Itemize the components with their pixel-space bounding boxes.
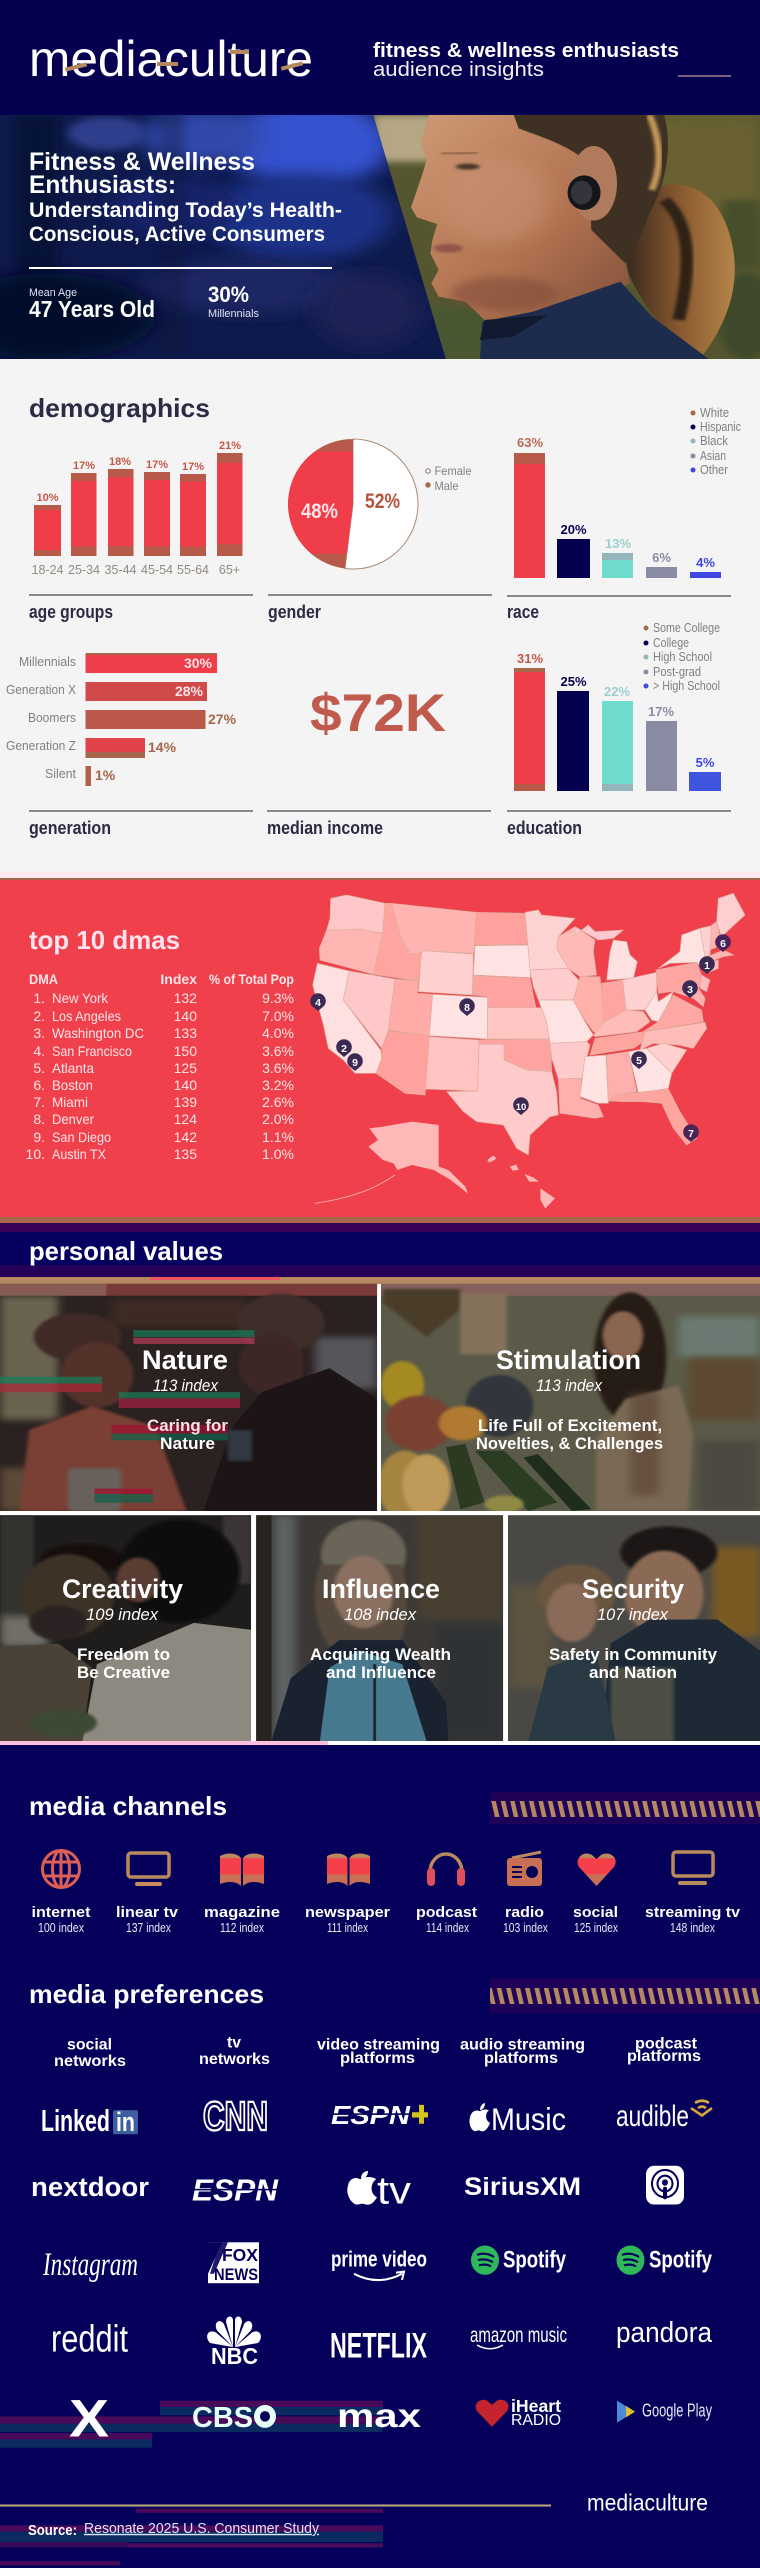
- label: generation: generation: [29, 818, 111, 838]
- stat: mean age: [29, 287, 155, 322]
- channel labels: social: [573, 1904, 618, 1921]
- tile: nature: Nature: [142, 1345, 228, 1375]
- icon: internet: [42, 1850, 80, 1888]
- photo: couple on couch: [0, 1515, 251, 1741]
- logo: spotify audio: [471, 2245, 566, 2275]
- table: top 10 dmas: 7.0%: [262, 1008, 294, 1024]
- legend: education: [644, 621, 720, 693]
- logo: fox news: NEWS: [214, 2266, 258, 2284]
- chart: race: 13%: [605, 536, 631, 551]
- logo: fox news: FOX: [222, 2245, 258, 2265]
- header band: [0, 0, 760, 115]
- logo: espn plus: ESPN: [331, 2101, 411, 2130]
- table: top 10 dmas: 1.: [33, 990, 45, 1006]
- legend: race: Asian: [700, 449, 726, 463]
- table: top 10 dmas: 9.: [33, 1129, 45, 1145]
- logo: reddit: reddit: [51, 2318, 128, 2360]
- chart: age groups: 17%: [182, 461, 204, 473]
- table: top 10 dmas: 1.1%: [262, 1129, 294, 1145]
- tile: creativity: [0, 1515, 251, 1741]
- tile: stimulation: 113 index: [536, 1376, 602, 1395]
- channel index values: 111 index: [327, 1921, 369, 1935]
- table: top 10 dmas: 9.3%: [262, 990, 294, 1006]
- tile: influence: [256, 1515, 503, 1741]
- table: top 10 dmas: 125: [174, 1060, 197, 1076]
- channel labels: [32, 1904, 741, 1921]
- chart: age groups: 55-64: [177, 563, 209, 577]
- map pins: 3: [687, 984, 693, 996]
- chart: generation: 14%: [148, 739, 177, 755]
- chart: education: 5%: [696, 755, 715, 770]
- table: top 10 dmas: 142: [174, 1129, 197, 1145]
- label: education: education: [507, 818, 582, 838]
- logo: iheart radio: iHeart: [511, 2396, 561, 2416]
- column headers: platforms: [340, 2050, 415, 2067]
- table: top 10 dmas: San Francisco: [52, 1043, 132, 1059]
- table: top 10 dmas: Atlanta: [52, 1060, 94, 1076]
- table: top 10 dmas: 135: [174, 1146, 197, 1162]
- photo: woman at market: [378, 1284, 760, 1520]
- channel labels: radio: [505, 1904, 544, 1921]
- panel: media preferences: [0, 1978, 760, 2565]
- chart: race: 63%: [517, 435, 543, 450]
- logo: prime video: [331, 2247, 427, 2280]
- logo: x: X: [69, 2389, 109, 2448]
- chart: generation: Silent: [45, 766, 76, 781]
- table: top 10 dmas: 150: [174, 1043, 197, 1059]
- stat: mean age: Mean Age: [29, 287, 77, 299]
- chart: generation: Generation X: [6, 682, 76, 697]
- legend: race: [690, 406, 741, 477]
- legend: education: > High School: [653, 679, 720, 693]
- hero background: blue bokeh: [0, 100, 451, 360]
- source label: Source:: [28, 2523, 77, 2539]
- hero heading: Fitness & Wellness: [29, 148, 255, 176]
- map pins: 5: [636, 1055, 642, 1067]
- icon: apple podcasts: [646, 2166, 684, 2205]
- hero panel: [0, 100, 760, 360]
- column headers: networks: [54, 2053, 126, 2070]
- source link: Resonate 2025 U.S. Consumer Study: [84, 2520, 320, 2537]
- channel index values: 137 index: [126, 1921, 172, 1935]
- chart: generation: Generation Z: [6, 738, 76, 753]
- tile: security: 107 index: [597, 1605, 668, 1624]
- chart: education: 25%: [560, 674, 587, 689]
- logo: siriusxm: SiriusXM: [464, 2174, 581, 2201]
- tile: influence: 108 index: [344, 1605, 416, 1624]
- logo: cbs: CBS: [192, 2401, 253, 2433]
- icon: radio: [507, 1852, 542, 1886]
- logo: prime video: prime video: [331, 2247, 427, 2272]
- table: top 10 dmas: New York: [52, 990, 109, 1006]
- map pins: 10: [516, 1102, 526, 1113]
- column headers: platforms: [627, 2048, 701, 2065]
- table: top 10 dmas: 124: [174, 1111, 197, 1127]
- footer: [0, 2490, 708, 2539]
- table: top 10 dmas: Austin TX: [52, 1146, 107, 1162]
- chart: gender pie: [288, 439, 472, 569]
- chart: generation: Boomers: [28, 710, 76, 725]
- chart: age groups: 10%: [36, 492, 59, 504]
- icon: streaming tv: [673, 1852, 713, 1885]
- table: top 10 dmas: 3.6%: [262, 1060, 294, 1076]
- panel: personal values: [0, 1223, 760, 1745]
- logo grid: [0, 2034, 713, 2565]
- chart: age groups: [32, 440, 242, 577]
- icon: social heart: [578, 1853, 616, 1886]
- table: top 10 dmas: 5.: [33, 1060, 45, 1076]
- table: top 10 dmas: Index: [160, 971, 197, 987]
- column headers: podcast: [635, 2035, 697, 2052]
- channel index values: 100 index: [38, 1921, 85, 1935]
- stat: millennials: Millennials: [208, 308, 259, 320]
- chart: generation: 30%: [184, 655, 213, 671]
- tile: nature: [0, 1284, 378, 1511]
- chart: age groups: 65+: [219, 563, 240, 577]
- logo: cbs: [192, 2401, 276, 2433]
- logo: google play: [617, 2399, 713, 2423]
- column headers: [54, 2034, 701, 2070]
- chart: education: 31%: [517, 651, 543, 666]
- panel: top 10 dmas: [0, 872, 760, 1223]
- tile: security: Safety in Community: [549, 1645, 718, 1664]
- tile: stimulation: [378, 1284, 760, 1520]
- panel: media channels: [29, 1791, 760, 1935]
- logo: google play: Google Play: [642, 2399, 713, 2420]
- legend: education: Post-grad: [653, 665, 701, 679]
- table: top 10 dmas: 3.: [33, 1025, 45, 1041]
- logo: spotify podcast: Spotify: [649, 2246, 712, 2273]
- logo: instagram: Instagram: [42, 2246, 138, 2282]
- label: median income: median income: [267, 818, 383, 838]
- chart: education: [514, 621, 721, 791]
- column headers: audio streaming: [460, 2036, 585, 2053]
- logo: espn: ESPN: [192, 2174, 279, 2208]
- chart: age groups: 17%: [73, 460, 95, 472]
- table: top 10 dmas: 6.: [33, 1077, 45, 1093]
- logo: amazon music: amazon music: [470, 2323, 567, 2347]
- chart: gender pie: 52%: [365, 490, 400, 513]
- map pins: 9: [352, 1057, 358, 1069]
- channel index values: 148 index: [670, 1921, 716, 1935]
- photo: friends at cafe: [0, 1284, 378, 1511]
- table: top 10 dmas: 7.: [33, 1094, 45, 1110]
- table: top 10 dmas: Washington DC: [52, 1025, 144, 1041]
- table: top 10 dmas: DMA: [29, 971, 58, 987]
- chart: generation: [6, 653, 237, 786]
- tile: creativity: 109 index: [86, 1605, 158, 1624]
- table: top 10 dmas: Denver: [52, 1111, 94, 1127]
- heading: top 10 dmas: top 10 dmas: [29, 925, 180, 955]
- ponytail: [627, 184, 735, 355]
- logo: pandora: pandora: [616, 2316, 713, 2348]
- channel index values: 112 index: [220, 1921, 265, 1935]
- hero heading: Understanding Today’s Health-: [29, 199, 342, 222]
- header subtitle: audience insights: [373, 59, 544, 81]
- map pins: 7: [688, 1128, 694, 1140]
- stat: median income: $72K: [310, 684, 446, 743]
- chart: age groups: 18-24: [32, 563, 64, 577]
- logo: nextdoor: nextdoor: [31, 2172, 149, 2202]
- legend: race: Black: [700, 434, 729, 448]
- channel labels: streaming tv: [645, 1904, 741, 1921]
- tile: influence: and Influence: [326, 1663, 436, 1682]
- table: top 10 dmas: 133: [174, 1025, 197, 1041]
- stat: millennials: [208, 282, 259, 320]
- tile: security: Security: [582, 1574, 684, 1604]
- neck and face: [411, 115, 630, 320]
- chart: us map: [310, 893, 745, 1208]
- header title: fitness & wellness enthusiasts: [373, 40, 679, 62]
- table: top 10 dmas: 3.6%: [262, 1043, 294, 1059]
- legend: education: High School: [653, 650, 712, 664]
- table: top 10 dmas: 4.: [33, 1043, 45, 1059]
- map: alaska and hawaii: [315, 1122, 555, 1208]
- chart: gender pie: Male: [434, 479, 459, 493]
- column headers: tv: [227, 2034, 241, 2051]
- hero heading: Conscious, Active Consumers: [29, 223, 325, 246]
- logo: spotify audio: Spotify: [503, 2246, 566, 2273]
- map pins: [310, 934, 731, 1142]
- table: top 10 dmas: 4.0%: [262, 1025, 294, 1041]
- glitch bands: [0, 2401, 383, 2565]
- logo: apple music: Music: [491, 2101, 566, 2137]
- stat: millennials: 30%: [208, 282, 249, 307]
- tile: creativity: Creativity: [62, 1574, 183, 1604]
- chart: race: 20%: [560, 522, 587, 537]
- logo: max: max: [337, 2396, 421, 2434]
- table: top 10 dmas: 140: [174, 1077, 197, 1093]
- chart: race: [514, 406, 741, 578]
- hero photo: runner with earbud: [368, 115, 760, 360]
- logo: iheart radio: [476, 2396, 561, 2429]
- icon: podcast headphones: [427, 1854, 465, 1886]
- label: age groups: age groups: [29, 602, 113, 622]
- chart: race: 6%: [652, 550, 671, 565]
- ear and earbud: [570, 146, 617, 221]
- tile: nature: Caring for: [147, 1416, 228, 1435]
- table: top 10 dmas: 2.6%: [262, 1094, 294, 1110]
- channel index values: 103 index: [503, 1921, 549, 1935]
- chart: generation: 28%: [175, 683, 204, 699]
- label: gender: gender: [268, 602, 321, 622]
- tile: stimulation: Life Full of Excitement,: [478, 1416, 662, 1435]
- table: top 10 dmas: 3.2%: [262, 1077, 294, 1093]
- tile: influence: Influence: [322, 1574, 440, 1604]
- map pins: 4: [315, 997, 321, 1009]
- legend: education: College: [653, 636, 689, 650]
- heading: personal values: personal values: [29, 1236, 223, 1266]
- logo: linkedin: Linked: [41, 2105, 110, 2138]
- photo: hiking couple: [508, 1515, 760, 1741]
- logo: fox news: [208, 2242, 259, 2284]
- tile: creativity: Freedom to: [77, 1645, 170, 1664]
- table: top 10 dmas: 132: [174, 990, 197, 1006]
- logo: nbc: NBC: [211, 2343, 258, 2369]
- jacket: [480, 282, 710, 360]
- logo: cnn: CNN: [203, 2094, 268, 2139]
- table: top 10 dmas: 8.: [33, 1111, 45, 1127]
- logo: apple tv: tv: [377, 2170, 411, 2213]
- table: top 10 dmas: Miami: [52, 1094, 88, 1110]
- logo: spotify podcast: [616, 2245, 712, 2275]
- logo: iheart radio: RADIO: [511, 2411, 561, 2429]
- channel labels: linear tv: [116, 1904, 179, 1921]
- table: top 10 dmas: [26, 971, 294, 1162]
- chart: generation: Millennials: [19, 654, 76, 669]
- column headers: platforms: [484, 2050, 558, 2067]
- channel index values: 114 index: [426, 1921, 470, 1935]
- chart: age groups: 17%: [146, 459, 168, 471]
- map pins: 1: [704, 960, 710, 972]
- logo: footer mediaculture: mediaculture: [587, 2490, 708, 2516]
- column headers: video streaming: [317, 2036, 440, 2053]
- heading: demographics: demographics: [29, 393, 210, 423]
- tile: nature: 113 index: [153, 1376, 218, 1395]
- channel labels: magazine: [204, 1904, 280, 1921]
- map pins: 8: [464, 1002, 470, 1014]
- table: top 10 dmas: 140: [174, 1008, 197, 1024]
- chart: gender pie: Female: [434, 464, 472, 478]
- chart: education: 17%: [648, 704, 674, 719]
- channel index values: 125 index: [574, 1921, 619, 1935]
- logo: nbc: [207, 2317, 261, 2369]
- heading: media preferences: media preferences: [29, 1979, 264, 2009]
- column headers: social: [67, 2036, 112, 2053]
- legend: race: White: [700, 406, 729, 420]
- map pins: 2: [341, 1043, 347, 1055]
- label: race: race: [507, 602, 539, 622]
- logo: mediaculture: mediaculture: [29, 31, 313, 87]
- logo: linkedin: in: [116, 2107, 135, 2137]
- chart: gender pie: 48%: [301, 500, 338, 523]
- logo: audible: audible: [616, 2100, 689, 2133]
- table: top 10 dmas: 139: [174, 1094, 197, 1110]
- channel index values: [38, 1921, 716, 1935]
- channel labels: internet: [32, 1904, 90, 1921]
- hero heading: Enthusiasts:: [29, 171, 176, 199]
- photo: woman in blue jacket: [256, 1515, 503, 1741]
- chart: generation: 1%: [95, 767, 116, 783]
- logo: netflix: NETFLIX: [330, 2326, 427, 2366]
- tile: security: [508, 1515, 760, 1741]
- chart: generation: 27%: [208, 711, 237, 727]
- chart: race: 4%: [696, 555, 715, 570]
- chart: age groups: 45-54: [141, 563, 173, 577]
- logo: apple tv: [347, 2170, 411, 2213]
- icon: linear tv: [128, 1853, 169, 1886]
- heading: media channels: media channels: [29, 1791, 227, 1821]
- legend: education: Some College: [653, 621, 720, 635]
- panel: demographics: [0, 359, 760, 878]
- table: top 10 dmas: 2.0%: [262, 1111, 294, 1127]
- tile: stimulation: Stimulation: [496, 1345, 641, 1375]
- chart: age groups: 35-44: [105, 563, 137, 577]
- tile: nature: Nature: [160, 1434, 215, 1453]
- stat: mean age: 47 Years Old: [29, 296, 155, 322]
- chart: age groups: 21%: [219, 440, 241, 452]
- table: top 10 dmas: Los Angeles: [52, 1008, 121, 1024]
- hair: [509, 115, 668, 270]
- legend: race: Other: [700, 463, 728, 477]
- table: top 10 dmas: San Diego: [52, 1129, 111, 1145]
- table: top 10 dmas: 2.: [33, 1008, 45, 1024]
- channel labels: podcast: [416, 1904, 477, 1921]
- tile: security: and Nation: [589, 1663, 677, 1682]
- column headers: networks: [199, 2051, 270, 2068]
- table: top 10 dmas: 10.: [26, 1146, 45, 1162]
- hero heading: [29, 148, 342, 246]
- channel labels: newspaper: [305, 1904, 390, 1921]
- table: top 10 dmas: % of Total Pop: [209, 971, 294, 987]
- tile: creativity: Be Creative: [77, 1663, 170, 1682]
- table: top 10 dmas: 1.0%: [262, 1146, 294, 1162]
- tile: influence: Acquiring Wealth: [310, 1645, 451, 1664]
- tile: stimulation: Novelties, & Challenges: [476, 1434, 663, 1453]
- chart: education: 22%: [604, 684, 630, 699]
- chart: age groups: 25-34: [68, 563, 100, 577]
- icon: magazine: [220, 1854, 264, 1886]
- icon: newspaper: [327, 1854, 370, 1886]
- map pins: 6: [720, 938, 726, 950]
- legend: race: Hispanic: [700, 420, 741, 434]
- table: top 10 dmas: Boston: [52, 1077, 93, 1093]
- chart: age groups: 18%: [109, 456, 131, 468]
